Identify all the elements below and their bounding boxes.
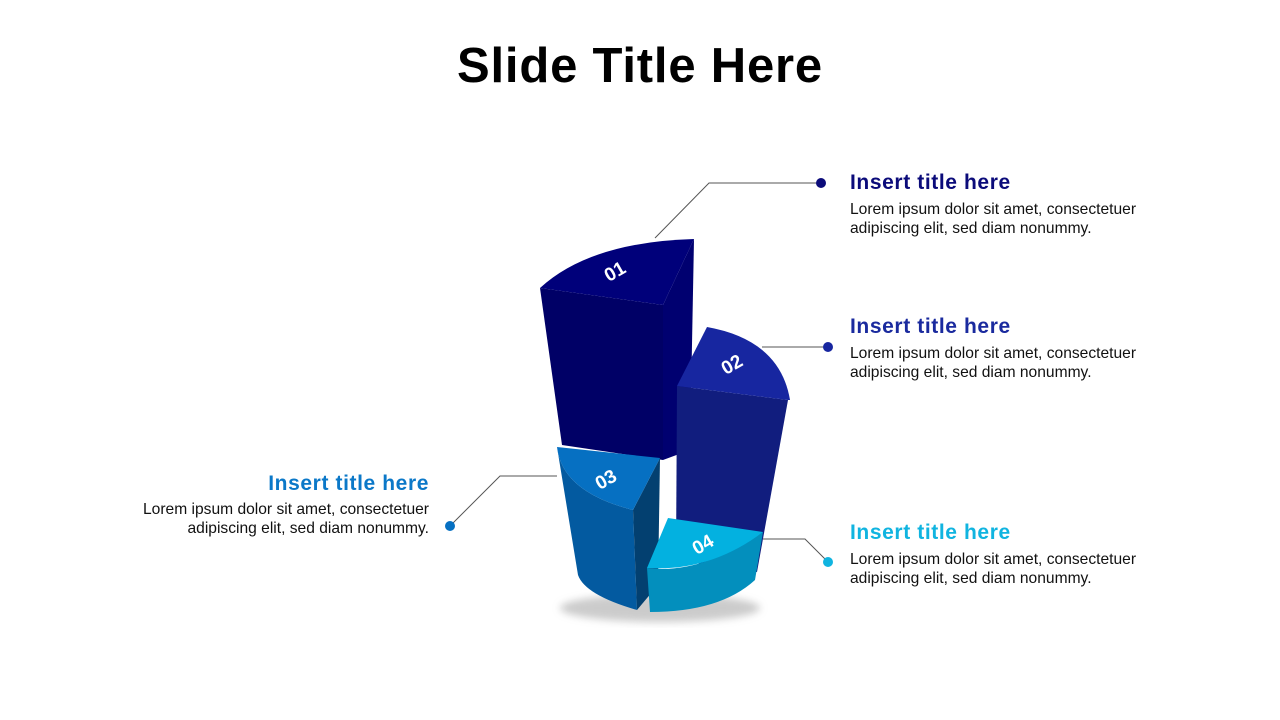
- text: adipiscing elit, sed diam nonummy.: [850, 570, 1092, 587]
- text: adipiscing elit, sed diam nonummy.: [850, 364, 1092, 381]
- shadow: [560, 594, 760, 622]
- text: adipiscing elit, sed diam nonummy.: [850, 220, 1092, 237]
- bar 02: [676, 327, 790, 572]
- text: Insert title here: [268, 472, 429, 495]
- bar 01: 01: [601, 258, 630, 287]
- text: Insert title here: [850, 315, 1011, 338]
- dots: [816, 178, 826, 188]
- title: Slide Title Here: [457, 39, 823, 93]
- text: Insert title here: [850, 171, 1011, 194]
- bar 02: 02: [718, 351, 747, 380]
- bar 03: 03: [592, 466, 621, 495]
- text block 4: [850, 521, 1136, 587]
- bar 01: [540, 239, 694, 460]
- text: adipiscing elit, sed diam nonummy.: [187, 520, 429, 537]
- connector lines: [450, 183, 828, 562]
- text: Lorem ipsum dolor sit amet, consectetuer: [850, 201, 1136, 218]
- text block 2: [850, 315, 1136, 381]
- text: Lorem ipsum dolor sit amet, consectetuer: [850, 551, 1136, 568]
- bar 04: [647, 518, 763, 612]
- text: Lorem ipsum dolor sit amet, consectetuer: [143, 501, 429, 518]
- text: Insert title here: [850, 521, 1011, 544]
- text block 1: [850, 171, 1136, 237]
- text block 3: [143, 472, 429, 537]
- bar 03: [557, 447, 660, 610]
- bar 04: 04: [689, 531, 718, 560]
- text: Lorem ipsum dolor sit amet, consectetuer: [850, 345, 1136, 362]
